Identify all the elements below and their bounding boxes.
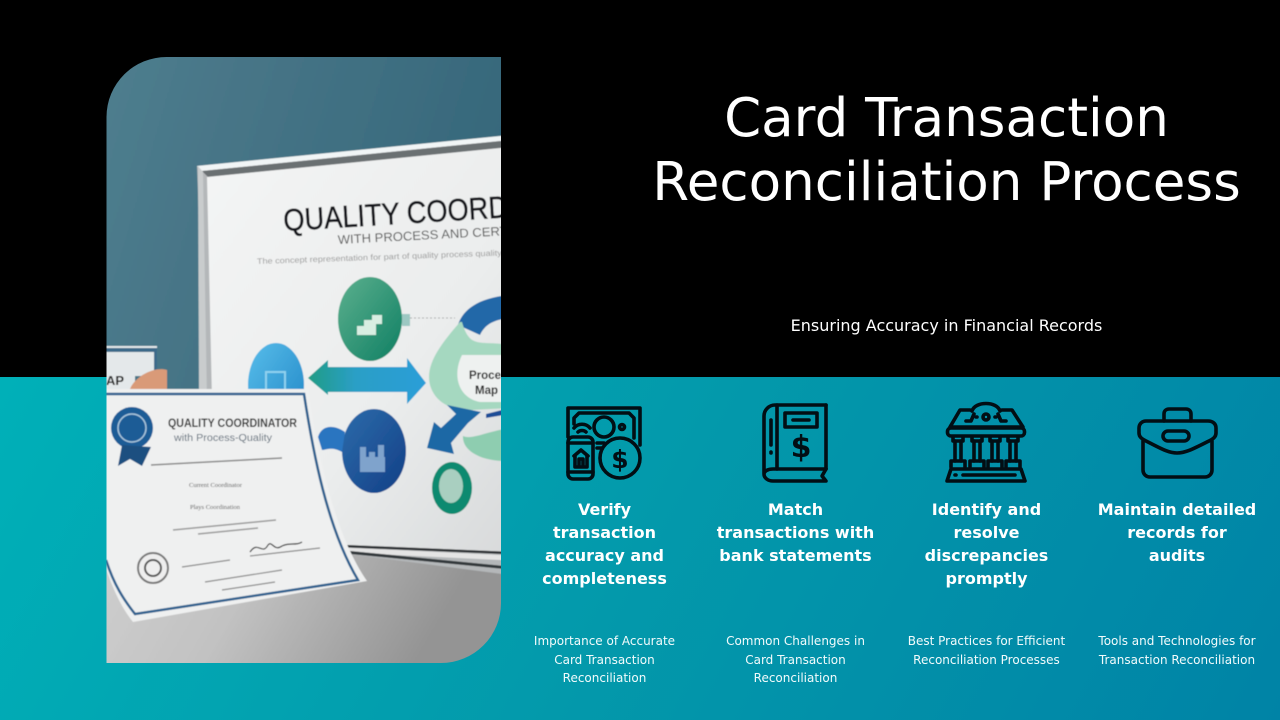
small green seal [432, 462, 472, 514]
note: best practices: Best Practices for Efficient [908, 634, 1065, 648]
heading: maintain: Maintain detailed [1098, 500, 1256, 519]
certificate rosette [111, 407, 153, 449]
framed board: The concept representation for part of quality process quality [257, 248, 502, 266]
heading: match: Match [768, 500, 823, 519]
subtitle: Ensuring Accuracy in Financial Records [791, 316, 1102, 335]
stamp and signature [138, 553, 168, 583]
certificate [100, 389, 367, 622]
note: challenges [726, 634, 865, 685]
note: importance [534, 634, 675, 685]
light blue circle [248, 342, 304, 390]
hand holding card: AP [106, 373, 124, 388]
heading: verify [542, 500, 667, 588]
photo: quality coordinator board and certificate [106, 57, 501, 663]
note: tools [1098, 634, 1256, 666]
wall [100, 50, 510, 400]
title [652, 86, 1241, 212]
icon: ledger book with dollar sign [762, 403, 828, 483]
dark blue arrow [427, 405, 481, 454]
icon: banknote, phone and coin: $ [611, 445, 629, 474]
note: best practices [908, 634, 1065, 666]
certificate: Plays Coordination [190, 504, 241, 511]
icon: briefcase [1137, 407, 1218, 479]
certificate: Current Coordinator [189, 482, 243, 489]
process map swirl [458, 296, 501, 336]
teal lower band [0, 377, 1280, 720]
note: challenges: Reconciliation [754, 671, 837, 685]
icon: bank building [945, 402, 1027, 483]
floor [106, 554, 501, 663]
double arrow [308, 358, 426, 404]
heading: maintain: audits [1149, 546, 1205, 565]
framed board: Proce [469, 370, 501, 382]
heading: match: transactions with [717, 523, 874, 542]
note: tools: Tools and Technologies for [1098, 634, 1256, 648]
note: tools: Transaction Reconciliation [1099, 652, 1255, 666]
board heading: QUALITY COORD [282, 189, 509, 238]
heading: verify: accuracy and [545, 546, 664, 565]
note: best practices: Reconciliation Processes [913, 652, 1060, 666]
heading: match [716, 500, 874, 565]
note: importance: Card Transaction [554, 652, 655, 666]
navy circle [342, 409, 406, 493]
green circle [338, 277, 402, 361]
heading: identify: discrepancies [925, 546, 1048, 565]
heading: verify: Verify [578, 500, 631, 519]
certificate heading: QUALITY COORDINATOR [168, 416, 297, 430]
note: importance: Importance of Accurate [534, 634, 675, 648]
note: challenges: Common Challenges in [726, 634, 865, 648]
heading: maintain: records for [1127, 523, 1227, 542]
heading: identify: Identify and [932, 500, 1041, 519]
icon: banknote, phone and coin [566, 406, 642, 481]
heading: match: bank statements [719, 546, 872, 565]
framed board: WITH PROCESS AND CERT [337, 224, 508, 247]
note: importance: Reconciliation [563, 671, 646, 685]
title: Reconciliation Process [652, 150, 1241, 212]
framed board [197, 135, 510, 575]
hand holding card [100, 346, 167, 389]
heading: identify [925, 500, 1048, 588]
heading: identify: promptly [945, 569, 1028, 588]
heading: verify: transaction [553, 523, 656, 542]
heading: identify: resolve [953, 523, 1020, 542]
icon: ledger book with dollar sign: $ [791, 430, 811, 465]
title: Card Transaction [724, 86, 1169, 148]
note: challenges: Card Transaction [745, 652, 846, 666]
framed board: Map [475, 385, 498, 397]
heading: maintain [1098, 500, 1256, 565]
heading: verify: completeness [542, 569, 667, 588]
certificate: with Process-Quality [173, 433, 272, 444]
